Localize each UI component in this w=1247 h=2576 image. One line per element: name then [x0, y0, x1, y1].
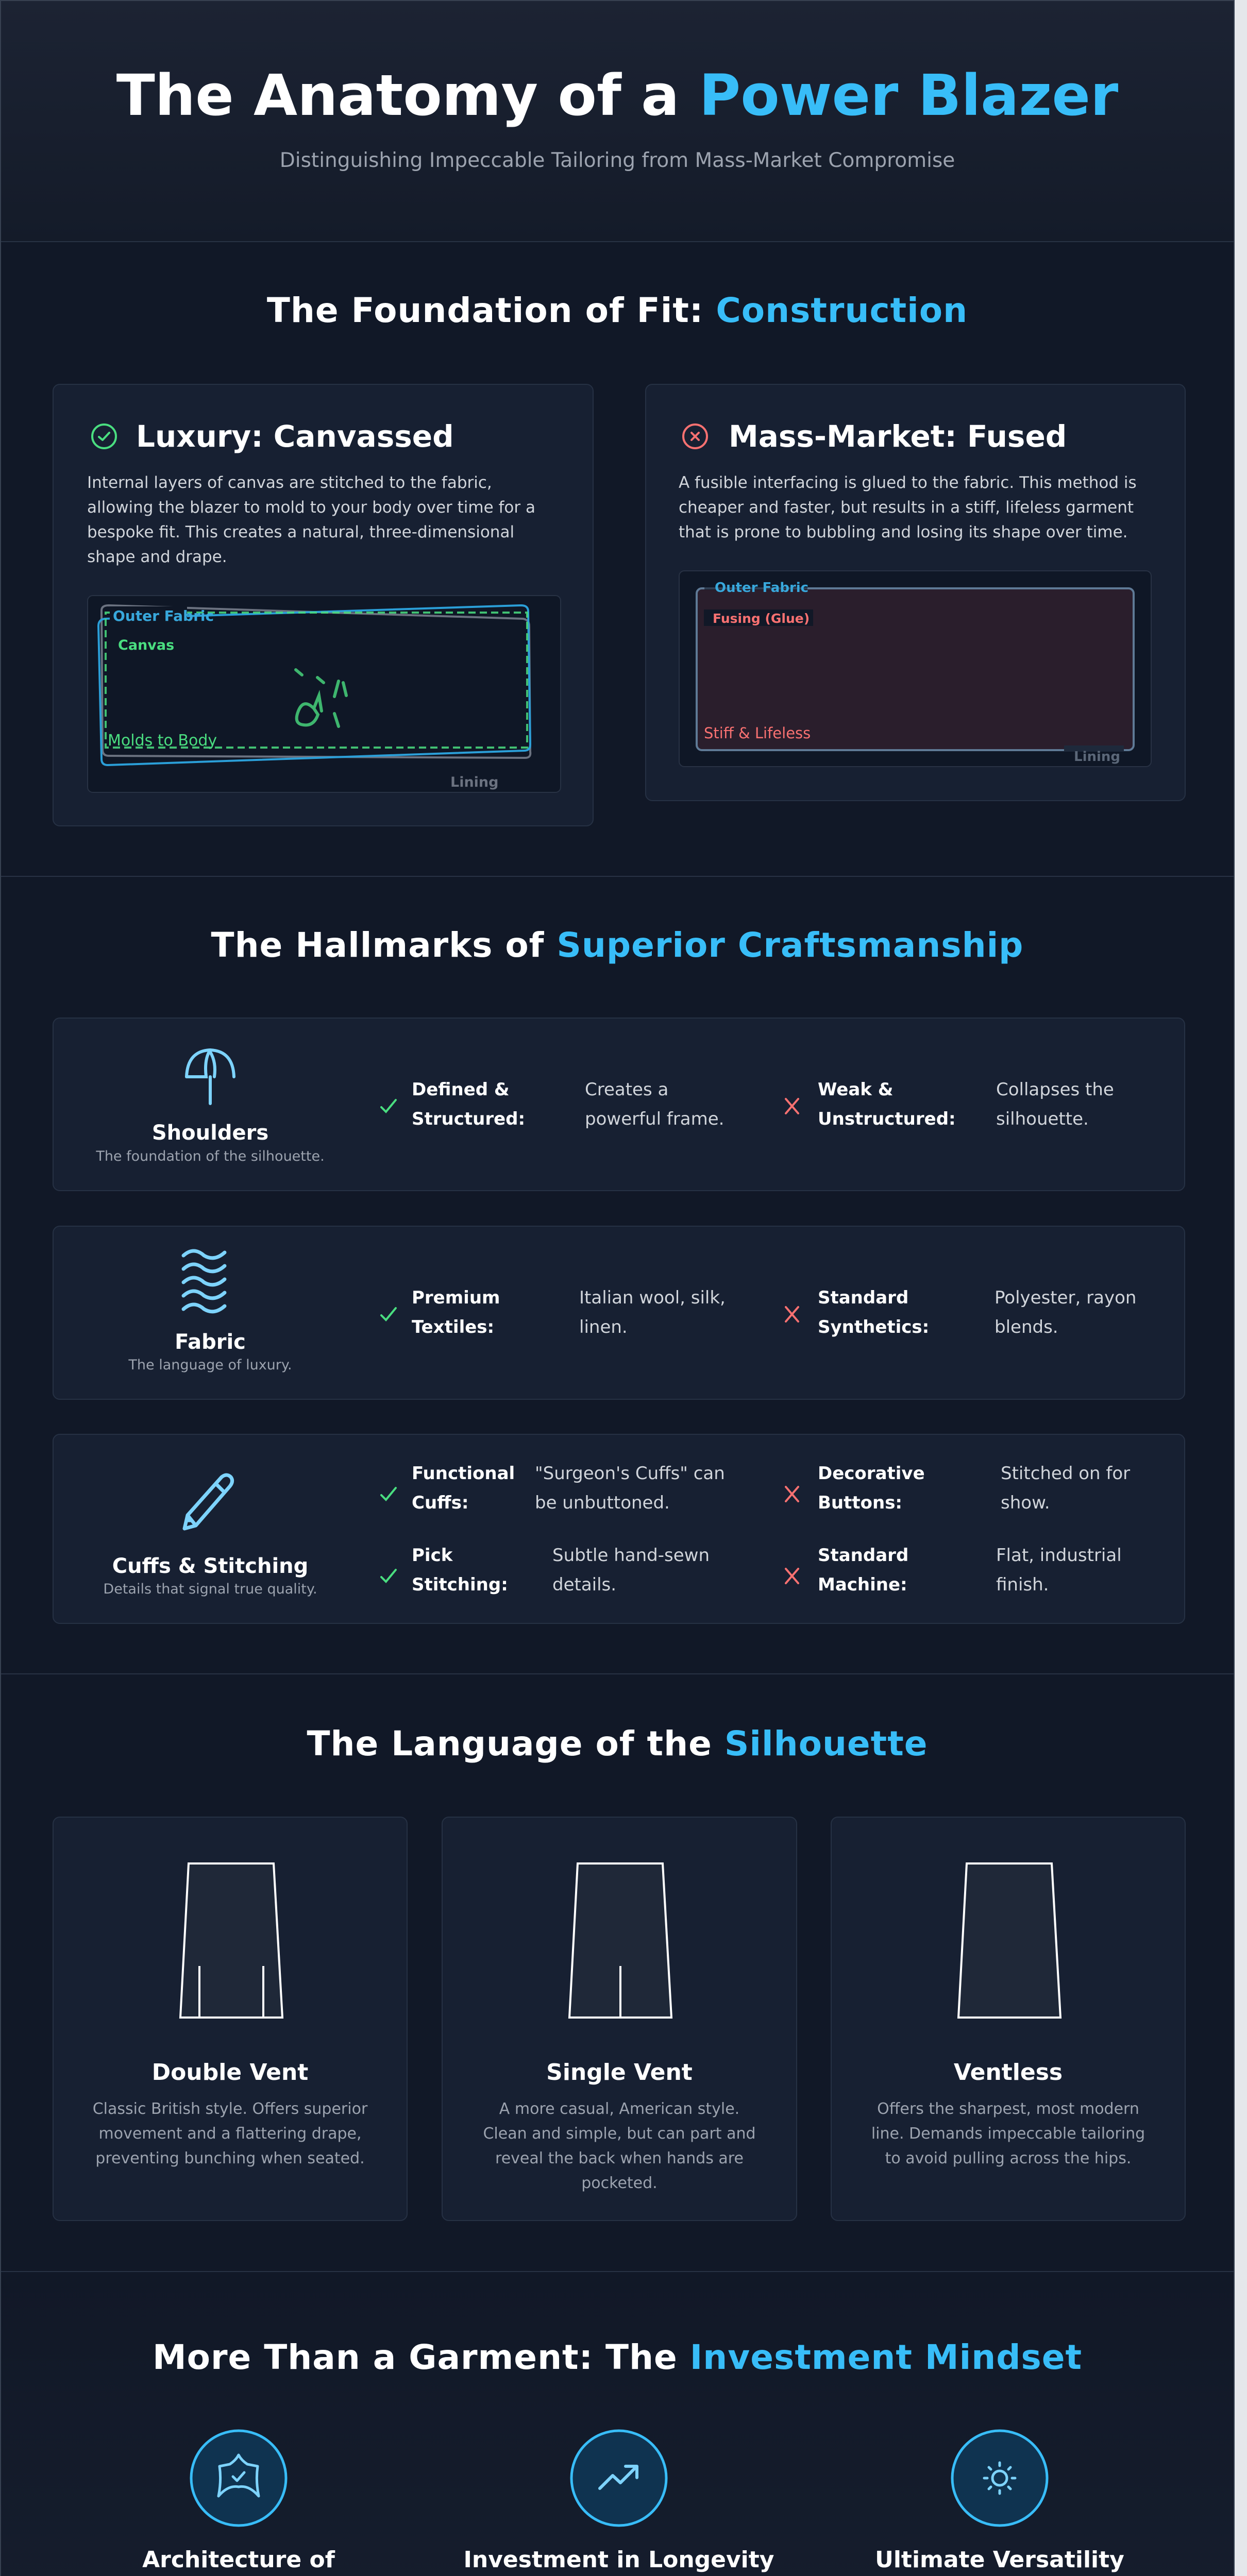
icon: fabric waves — [181, 1249, 227, 1314]
panel: shoulders row: Weak & — [818, 1079, 893, 1100]
icon: pencil/needle — [182, 1473, 234, 1530]
panel: shoulders row: The foundation of the silhouette. — [96, 1148, 325, 1164]
subtitle: Distinguishing Impeccable Tailoring from Mass-Market Compromise — [280, 149, 955, 172]
panel: shoulders row: powerful frame. — [585, 1109, 724, 1129]
good — [380, 1307, 397, 1321]
text block: A fusible interfacing is glued to the fabric. This method is — [679, 473, 1137, 492]
panel: luxury canvassed — [53, 384, 594, 826]
section 4 background — [1, 2272, 1234, 2576]
text block — [87, 473, 535, 566]
icon: trend arrow — [570, 2430, 668, 2527]
text block: bespoke fit. This creates a natural, three-dimensional — [87, 523, 514, 541]
panel: double vent — [53, 1817, 408, 2221]
good 2 — [380, 1568, 397, 1583]
panel: cuffs row: Functional — [412, 1463, 515, 1484]
diagram: canvassed layers: Molds to Body — [108, 732, 217, 750]
diagram: canvassed layers: Lining — [450, 774, 499, 790]
column: longevity — [464, 2430, 774, 2573]
panel: single vent: Clean and simple, but can part and — [483, 2125, 756, 2143]
icon: check circle — [91, 423, 117, 449]
panel: fabric row: linen. — [579, 1317, 628, 1337]
panel: cuffs row: Standard — [818, 1545, 908, 1566]
panel: cuffs row: Machine: — [818, 1574, 907, 1595]
panel: double vent: movement and a flattering drape, — [99, 2125, 362, 2143]
panel: mass-market fused — [645, 384, 1186, 801]
panel: ventless: Offers the sharpest, most modern — [877, 2100, 1139, 2118]
panel: cuffs row: Decorative — [818, 1463, 925, 1484]
panel: cuffs row: Cuffs: — [412, 1493, 469, 1513]
column: confidence — [142, 2430, 335, 2573]
panel: double vent: Double Vent — [152, 2059, 308, 2086]
heading: silhouette: The Language of the Silhouette — [307, 1724, 928, 1764]
text block: cheaper and faster, but results in a stiff, lifeless garment — [679, 498, 1134, 517]
panel: single vent — [442, 1817, 797, 2221]
bad 1 — [784, 1486, 800, 1502]
heading: construction: The Foundation of Fit: Construction — [267, 291, 968, 330]
panel: double vent: preventing bunching when seated. — [95, 2149, 365, 2167]
panel: shoulders row — [53, 1018, 1185, 1191]
panel: cuffs row: details. — [552, 1574, 616, 1595]
icon: double vent jacket — [179, 1862, 283, 2019]
panel: single vent: A more casual, American style. — [499, 2100, 739, 2118]
panel: shoulders row: Defined & — [412, 1079, 510, 1100]
panel: cuffs row: Pick — [412, 1545, 452, 1566]
panel: cuffs row: "Surgeon's Cuffs" can — [535, 1463, 725, 1484]
icon label: Fabric — [175, 1330, 246, 1354]
diagram: fused layers — [679, 570, 1152, 767]
card title: Luxury: Canvassed — [136, 419, 454, 454]
panel: shoulders row: silhouette. — [996, 1109, 1089, 1129]
text block — [679, 473, 1137, 541]
diagram: canvassed layers — [87, 595, 561, 793]
diagram: canvassed layers: Canvas — [118, 637, 174, 653]
bad — [784, 1097, 800, 1115]
header — [1, 1, 1234, 241]
bad — [784, 1306, 800, 1323]
panel: cuffs row: Stitched on for — [1001, 1463, 1130, 1484]
panel: fabric row: Synthetics: — [818, 1317, 929, 1337]
panel: single vent: pocketed. — [581, 2174, 658, 2192]
panel: cuffs row: be unbuttoned. — [535, 1493, 670, 1513]
icon: shoulders — [185, 1048, 235, 1105]
panel: fabric row: Standard — [818, 1287, 908, 1308]
icon: ventless jacket — [957, 1862, 1061, 2019]
good — [380, 1098, 397, 1113]
diagram: fused layers: Fusing (Glue) — [713, 611, 810, 626]
panel: single vent: reveal the back when hands are — [495, 2149, 744, 2167]
panel: shoulders row: Collapses the — [996, 1079, 1114, 1100]
panel: ventless: Ventless — [954, 2059, 1063, 2086]
text block: allowing the blazer to mold to your body over time for a — [87, 498, 535, 517]
panel: cuffs row — [53, 1434, 1185, 1624]
heading: craftsmanship: The Hallmarks of Superior Craftsmanship — [211, 925, 1023, 965]
column: versatility — [875, 2430, 1124, 2573]
panel: shoulders row: Creates a — [585, 1079, 668, 1100]
panel: double vent: Classic British style. Offers superior — [93, 2100, 367, 2118]
column: versatility: Ultimate Versatility — [875, 2547, 1124, 2573]
text block: Internal layers of canvas are stitched to the fabric, — [87, 473, 492, 492]
panel: fabric row — [53, 1226, 1185, 1400]
panel: ventless — [831, 1817, 1186, 2221]
panel: single vent: Single Vent — [546, 2059, 693, 2086]
panel: cuffs row: show. — [1001, 1493, 1050, 1513]
panel: fabric row: The language of luxury. — [128, 1357, 292, 1373]
panel: ventless: to avoid pulling across the hips. — [885, 2149, 1131, 2167]
card title: Mass-Market: Fused — [729, 419, 1067, 454]
diagram: fused layers: Lining — [1074, 749, 1120, 765]
panel: fabric row: Textiles: — [412, 1317, 494, 1337]
good 1 — [380, 1487, 397, 1501]
diagram: canvassed layers: Outer Fabric — [113, 607, 214, 624]
column: confidence: Architecture of — [142, 2547, 335, 2573]
panel: cuffs row: Subtle hand-sewn — [552, 1545, 710, 1566]
panel: ventless: line. Demands impeccable tailoring — [871, 2125, 1145, 2143]
icon label: Shoulders — [152, 1121, 268, 1145]
diagram: fused layers: Stiff & Lifeless — [704, 724, 811, 742]
bad 2 — [784, 1567, 800, 1585]
text block: shape and drape. — [87, 548, 227, 566]
panel: fabric row: Italian wool, silk, — [579, 1287, 726, 1308]
panel: cuffs row: Buttons: — [818, 1493, 902, 1513]
title: The Anatomy of a Power Blazer — [116, 62, 1118, 128]
panel: fabric row: blends. — [995, 1317, 1058, 1337]
panel: cuffs row: Details that signal true quality. — [103, 1581, 317, 1597]
panel: cuffs row: finish. — [996, 1574, 1049, 1595]
diagram: fused layers: Outer Fabric — [715, 580, 808, 596]
icon: sun — [951, 2430, 1048, 2527]
icon label: Cuffs & Stitching — [112, 1554, 308, 1578]
column: longevity: Investment in Longevity — [464, 2547, 774, 2573]
icon: cross circle — [682, 423, 708, 449]
panel: shoulders row: Structured: — [412, 1109, 525, 1129]
panel: shoulders row: Unstructured: — [818, 1109, 956, 1129]
panel: fabric row: Premium — [412, 1287, 500, 1308]
icon: single vent jacket — [568, 1862, 673, 2019]
text block: that is prone to bubbling and losing its shape over time. — [679, 523, 1128, 541]
icon: shield — [190, 2430, 288, 2527]
panel: cuffs row: Flat, industrial — [996, 1545, 1122, 1566]
panel: cuffs row: Stitching: — [412, 1574, 508, 1595]
panel: fabric row: Polyester, rayon — [995, 1287, 1136, 1308]
heading: investment: More Than a Garment: The Investment Mindset — [153, 2337, 1082, 2377]
